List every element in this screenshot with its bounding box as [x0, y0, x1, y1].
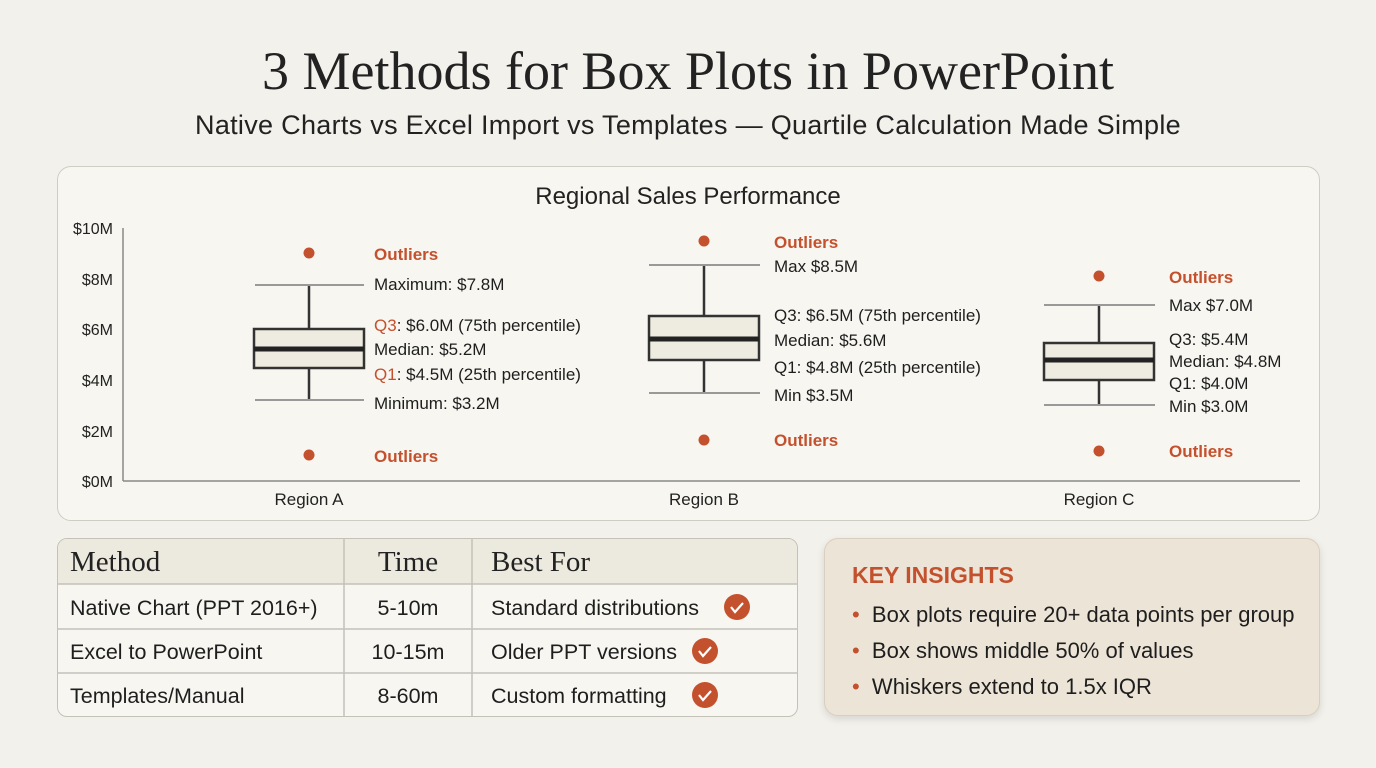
header row: Best For	[491, 546, 590, 578]
insights heading: KEY INSIGHTS	[852, 562, 1014, 588]
box: Region B: Outliers	[774, 431, 838, 450]
x labels: Region B	[669, 490, 739, 509]
box: Region A: Q1: $4.5M (25th percentile)	[374, 365, 581, 384]
panel: chart	[57, 166, 1320, 521]
x labels: Region A	[274, 490, 344, 509]
table: methods	[57, 538, 798, 717]
insights bullets: • Box shows middle 50% of values	[852, 638, 1194, 663]
header row: Time	[378, 546, 438, 578]
rows: Standard distributions	[491, 596, 699, 620]
y axis: $2M	[82, 424, 113, 441]
box: Region A: Outliers	[374, 447, 438, 466]
box: Region C: Max $7.0M	[1169, 296, 1253, 315]
box: Region A: Q3: $6.0M (75th percentile)	[374, 316, 581, 335]
box: Region A	[254, 245, 581, 466]
insights bullets: • Box plots require 20+ data points per group	[852, 602, 1294, 627]
y axis	[73, 221, 1300, 491]
box: Region A: Minimum: $3.2M	[374, 394, 500, 413]
rows: 8-60m	[378, 684, 438, 708]
box: Region C: Min $3.0M	[1169, 397, 1248, 416]
box: Region A: Maximum: $7.8M	[374, 275, 504, 294]
chart title: Regional Sales Performance	[535, 183, 841, 210]
insights bullets	[852, 602, 1294, 699]
rows: Older PPT versions	[491, 640, 677, 664]
insights bullets: • Whiskers extend to 1.5x IQR	[852, 674, 1152, 699]
box: Region C: Outliers	[1169, 442, 1233, 461]
box: Region C: Q3: $5.4M	[1169, 330, 1248, 349]
panel: key insights	[824, 538, 1320, 716]
box: Region B: Q3: $6.5M (75th percentile)	[774, 306, 981, 325]
header row	[70, 546, 590, 578]
y axis: $4M	[82, 373, 113, 390]
box: Region C: Q1: $4.0M	[1169, 374, 1248, 393]
title: 3 Methods for Box Plots in PowerPoint	[262, 41, 1114, 101]
box: Region B: Median: $5.6M	[774, 331, 886, 350]
check icons	[692, 594, 750, 708]
rows: Templates/Manual	[70, 684, 244, 708]
y axis: $6M	[82, 322, 113, 339]
box: Region C: Outliers	[1169, 268, 1233, 287]
box: Region C	[1044, 268, 1281, 461]
box: Region B: Min $3.5M	[774, 386, 853, 405]
box: Region A: Median: $5.2M	[374, 340, 486, 359]
rows: 5-10m	[378, 596, 438, 620]
y axis: $8M	[82, 272, 113, 289]
box: Region B	[649, 233, 981, 450]
box: Region C: Median: $4.8M	[1169, 352, 1281, 371]
rows: Custom formatting	[491, 684, 667, 708]
x labels	[274, 490, 1134, 509]
y axis: $0M	[82, 474, 113, 491]
box: Region B: Outliers	[774, 233, 838, 252]
rows: 10-15m	[372, 640, 444, 664]
subtitle: Native Charts vs Excel Import vs Templates — Quartile Calculation Made Simple	[195, 110, 1181, 140]
header row: Method	[70, 546, 161, 578]
box: Region B: Max $8.5M	[774, 257, 858, 276]
y axis: $10M	[73, 221, 113, 238]
box: Region A: Outliers	[374, 245, 438, 264]
x labels: Region C	[1064, 490, 1134, 509]
rows	[70, 596, 699, 708]
box: Region B: Q1: $4.8M (25th percentile)	[774, 358, 981, 377]
rows: Excel to PowerPoint	[70, 640, 262, 664]
rows: Native Chart (PPT 2016+)	[70, 596, 318, 620]
